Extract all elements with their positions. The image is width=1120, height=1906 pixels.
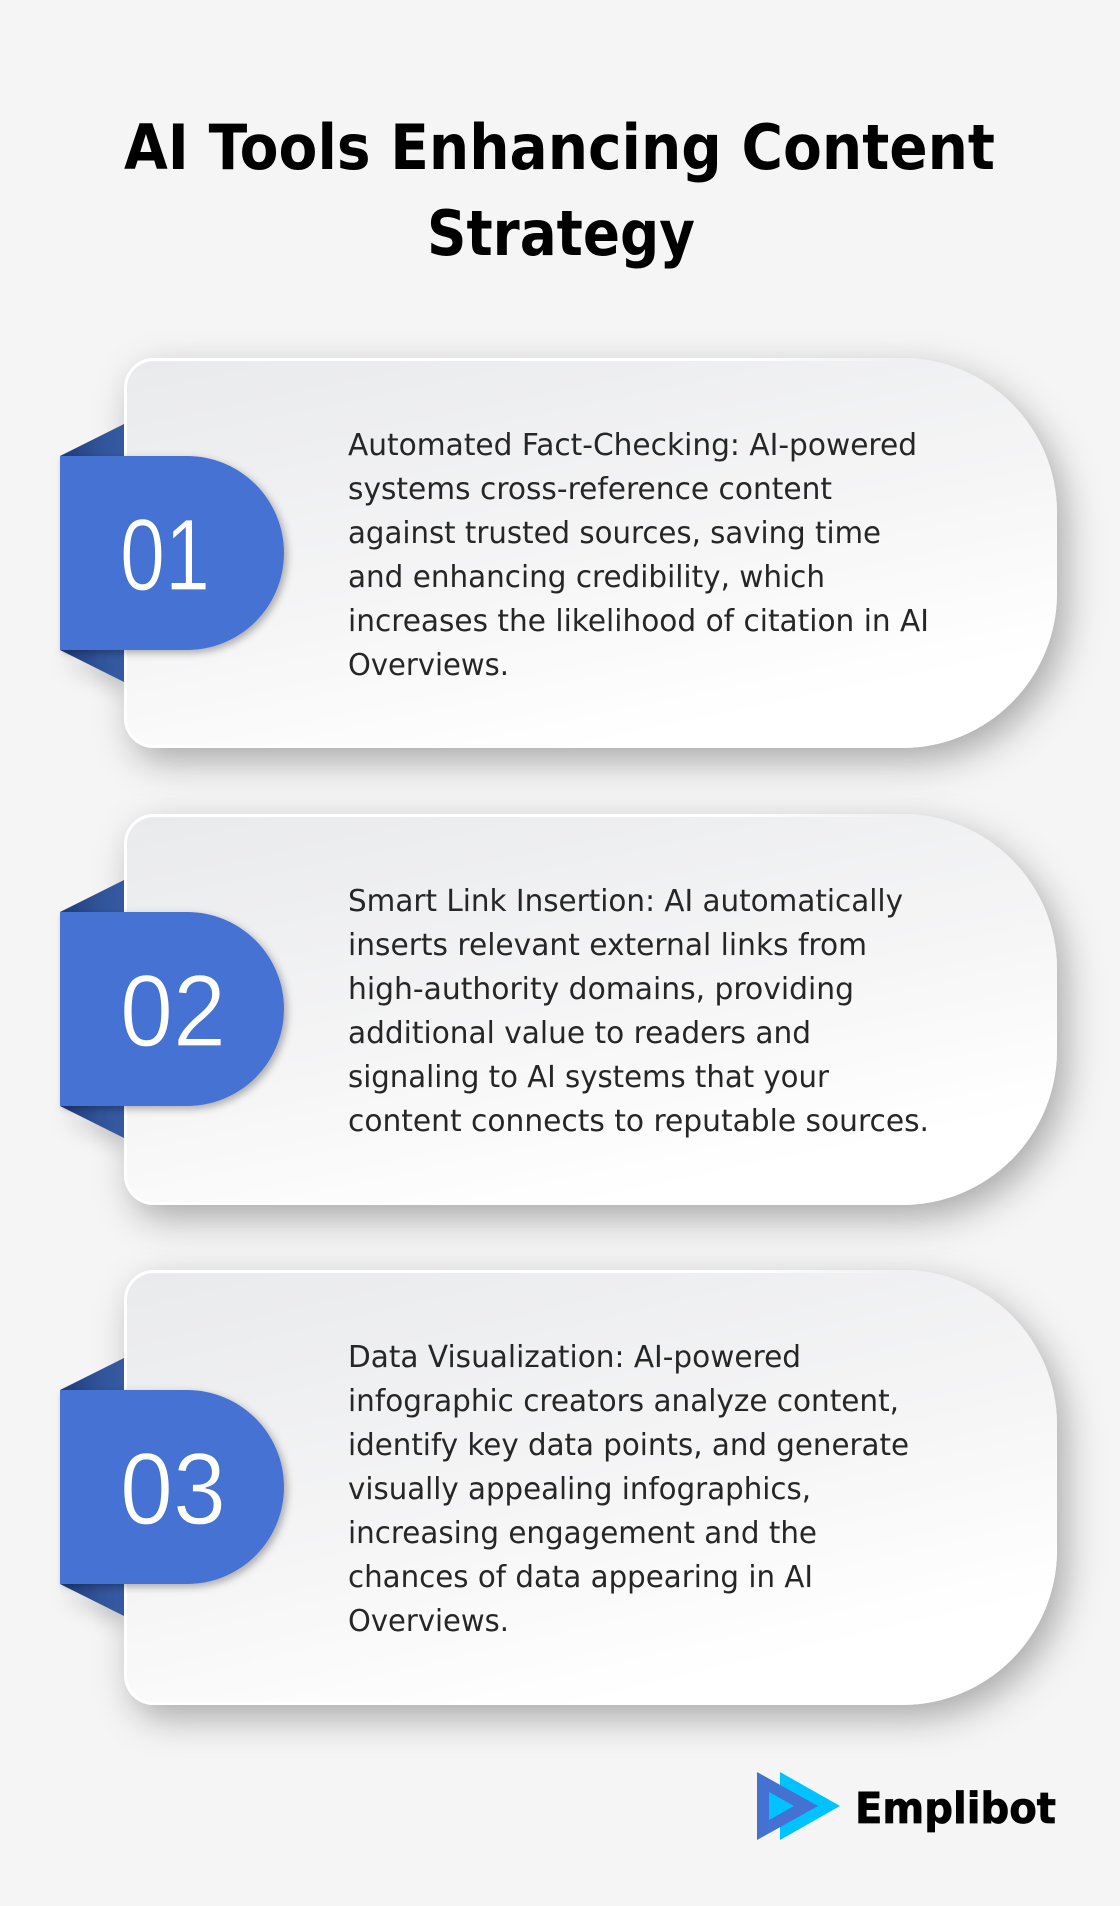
number badge 02: 02 [120,954,226,1068]
title: AI Tools Enhancing Content [124,111,995,184]
text block 02: Smart Link Insertion: AI automatically [348,884,903,919]
text block 03 [348,1340,909,1639]
card 01 [124,358,1057,748]
text block 01 [348,428,929,683]
icon: double play triangles [757,1772,840,1840]
card 03 [124,1270,1057,1705]
number badge 01 [60,456,284,650]
text block 02: inserts relevant external links from [348,928,867,963]
text block 03: identify key data points, and generate [348,1428,909,1463]
text block 03: visually appealing infographics, [348,1472,811,1507]
text block 02 [348,884,929,1139]
folded ribbon corners 02 [60,880,124,1138]
text block 01: Automated Fact-Checking: AI-powered [348,428,917,463]
text block 03: Data Visualization: AI-powered [348,1340,801,1375]
number badge 01: 01 [120,498,210,612]
logo: Emplibot [757,1772,1056,1840]
card 02 [124,814,1057,1205]
number badge 03 [60,1390,284,1584]
text block 02: signaling to AI systems that your [348,1060,830,1095]
panel: step 03 data visualization [60,1270,1057,1705]
text block 02: additional value to readers and [348,1016,811,1051]
text block 03: increasing engagement and the [348,1516,817,1551]
number badge 02 [60,912,284,1106]
text block 03: infographic creators analyze content, [348,1384,899,1419]
text block 02: content connects to reputable sources. [348,1104,929,1139]
text block 02: high-authority domains, providing [348,972,854,1007]
wordmark: Emplibot [855,1784,1056,1834]
title [124,111,995,270]
text block 01: and enhancing credibility, which [348,560,825,595]
folded ribbon corners 03 [60,1358,124,1616]
text block 01: Overviews. [348,648,509,683]
number badge 03: 03 [120,1432,226,1546]
title: Strategy [427,197,695,270]
text block 03: chances of data appearing in AI [348,1560,813,1595]
text block 03: Overviews. [348,1604,509,1639]
panel: step 02 smart link insertion [60,814,1057,1205]
text block 01: systems cross-reference content [348,472,832,507]
folded ribbon corners 01 [60,424,124,682]
panel: step 01 automated fact-checking [60,358,1057,748]
text block 01: against trusted sources, saving time [348,516,881,551]
text block 01: increases the likelihood of citation in AI [348,604,929,639]
